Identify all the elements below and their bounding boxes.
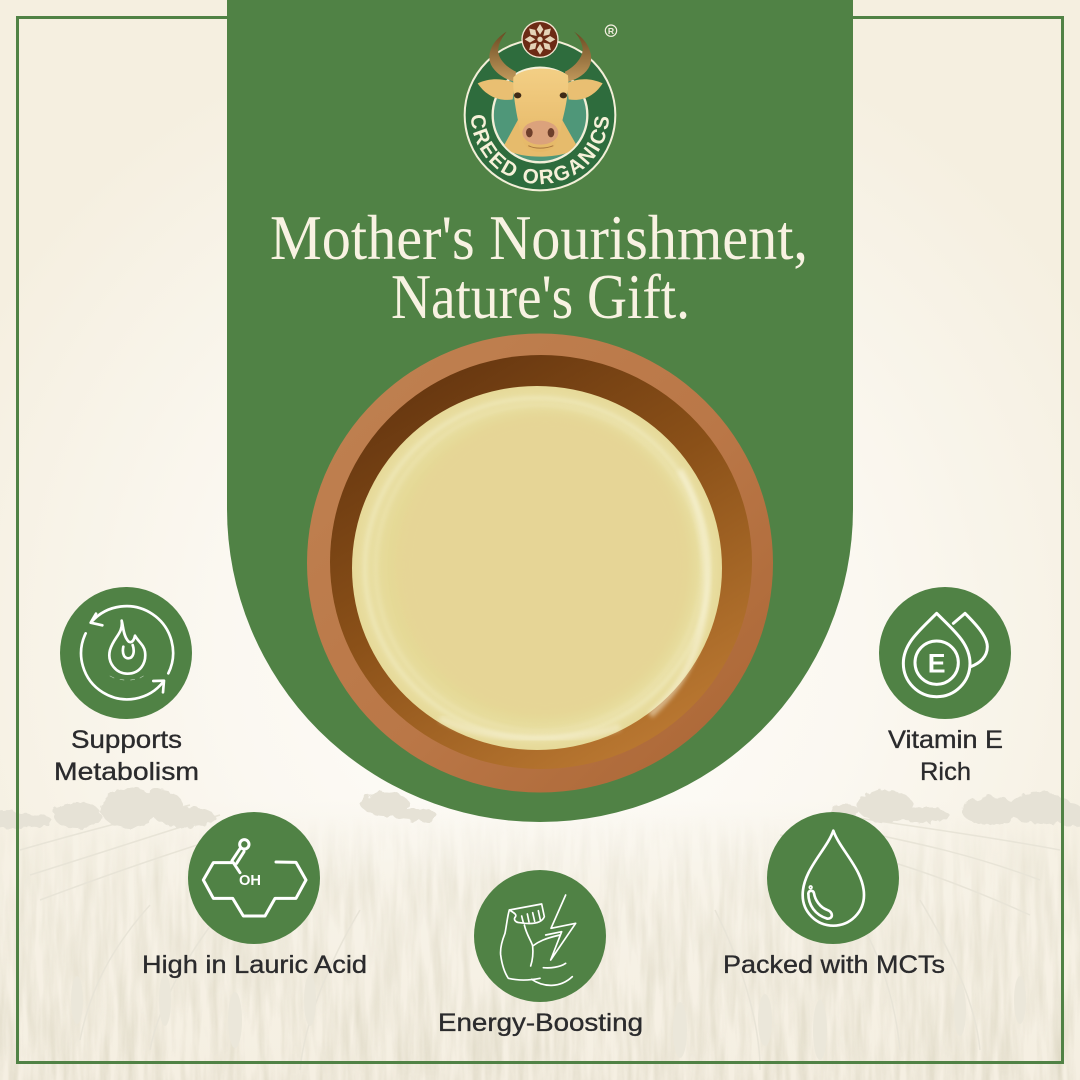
icon: lauric acid molecule: OH <box>239 873 261 889</box>
label: Supports <box>71 726 182 754</box>
logo text: CREED ORGANICS <box>471 115 609 184</box>
icon: flexed arm with lightning <box>474 870 606 1002</box>
registered mark <box>605 25 617 36</box>
benefit: Energy-Boosting <box>438 870 643 1037</box>
clay bowl of oil <box>307 334 773 792</box>
icon: metabolism flame <box>60 587 192 719</box>
label: High in Lauric Acid <box>142 951 367 979</box>
bowl inner wall <box>330 355 752 769</box>
label: Packed with MCTs <box>723 951 945 979</box>
benefit: High in Lauric Acid <box>142 812 367 979</box>
logo roundel <box>465 40 615 190</box>
headline <box>270 202 808 332</box>
background: wheat field illustration <box>0 800 1080 1080</box>
benefit: Supports Metabolism <box>54 587 199 786</box>
background: distant trees left <box>0 788 215 829</box>
label <box>888 726 1003 786</box>
logo: Creed Organics <box>464 20 618 192</box>
oil surface <box>352 386 722 750</box>
label: Vitamin E <box>888 726 1003 754</box>
bowl rim <box>307 334 773 792</box>
panel: green arch <box>227 0 853 822</box>
headline: Nature's Gift. <box>391 261 690 332</box>
benefit: Packed with MCTs <box>723 812 945 979</box>
logo medallion <box>521 21 559 58</box>
label: Energy-Boosting <box>438 1009 643 1037</box>
headline: Mother's Nourishment, <box>270 202 808 273</box>
background: distant trees right <box>361 790 1080 827</box>
icon: oil drop <box>767 812 899 944</box>
icon: lauric acid molecule <box>188 812 320 944</box>
registered mark: R <box>608 26 615 36</box>
benefit: Vitamin E Rich <box>879 587 1011 786</box>
label: Rich <box>920 758 971 786</box>
label: Metabolism <box>54 758 199 786</box>
icon: vitamin E drops <box>879 587 1011 719</box>
label <box>54 726 199 786</box>
icon: vitamin E drops: E <box>928 648 946 678</box>
logo cow <box>478 32 603 157</box>
